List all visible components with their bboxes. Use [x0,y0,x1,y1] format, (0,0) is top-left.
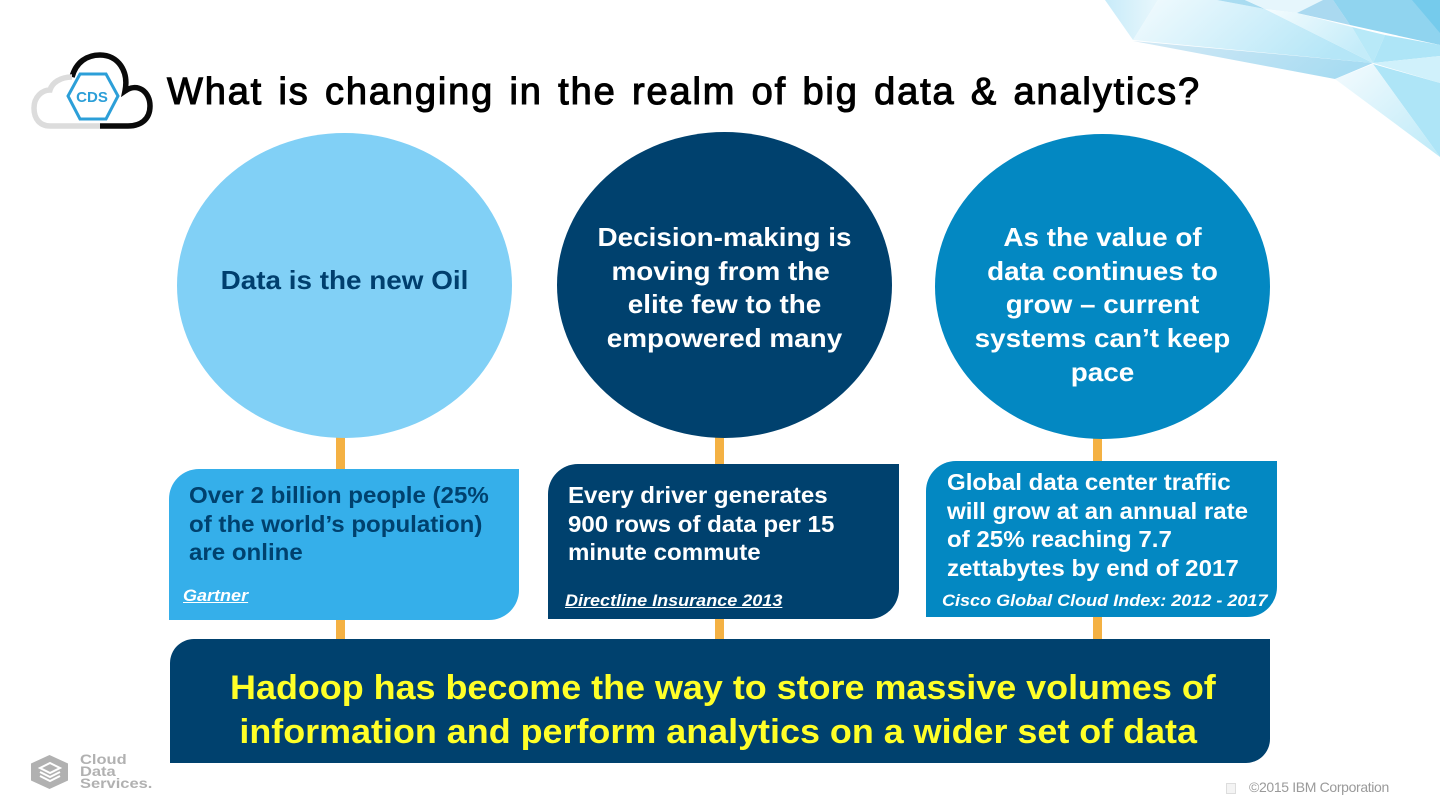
icon: footer glyph box [1226,783,1236,794]
brand text: Cloud Data Services [80,752,152,791]
circle text: data continues to [987,256,1218,286]
card text: of the world’s population) [189,511,482,537]
card text: zettabytes by end of 2017 [947,555,1239,581]
circle: data is the new oil [177,133,512,438]
circle text [597,222,852,353]
brand text: Cloud Data Services: Data [80,764,116,779]
icon: Cloud Data Services hexagon logo [31,755,68,789]
circle text: As the value of [1003,222,1202,252]
card text [189,482,489,565]
background: decorative polygons top right [1105,0,1440,157]
circle text: empowered many [607,323,842,353]
circle text: elite few to the [628,289,821,319]
circle text: Decision-making is [597,222,852,252]
banner: Hadoop conclusion [170,639,1270,763]
card: data center traffic [926,461,1277,617]
brand text: Cloud Data Services: Services. [80,776,152,791]
connector: column 3 [1093,436,1102,640]
circle text: grow – current [1006,289,1199,319]
connector: column 2 [715,436,724,640]
card text: minute commute [568,539,761,565]
circle text: Data is the new Oil [221,265,468,295]
brand text: Cloud Data Services: Cloud [80,752,127,767]
card text: Global data center traffic [947,469,1231,495]
footer: copyright: ©2015 IBM Corporation [1249,779,1389,795]
banner text [230,669,1216,751]
card text [568,482,834,565]
banner text: information and perform analytics on a wider set of data [239,713,1197,751]
card: every driver [548,464,899,619]
source: Cisco Global Cloud Index: 2012 - 2017 [942,591,1267,610]
card text: 900 rows of data per 15 [568,511,834,537]
source: Gartner [183,586,248,605]
connector: column 1 [336,436,345,640]
circle: value of data [935,134,1270,439]
card text [946,469,1248,581]
circle: decision-making [557,132,892,438]
card text: Over 2 billion people (25% [189,482,489,508]
circle text: systems can’t keep [975,323,1230,353]
icon: CDS cloud logo [31,52,153,129]
source: Directline Insurance 2013 [565,591,782,610]
circle text [975,222,1230,387]
card text: Every driver generates [568,482,828,508]
circle text: moving from the [611,256,830,286]
card text: will grow at an annual rate [947,498,1248,524]
banner text: Hadoop has become the way to store massive volumes of [230,669,1216,707]
card text: are online [189,539,303,565]
card: billion people [169,469,519,620]
circle text: pace [1071,357,1134,387]
icon: CDS cloud logo: CDS [76,89,108,106]
card text: of 25% reaching 7.7 [947,526,1172,552]
title: What is changing in the realm of big data & analytics? [167,71,1201,113]
